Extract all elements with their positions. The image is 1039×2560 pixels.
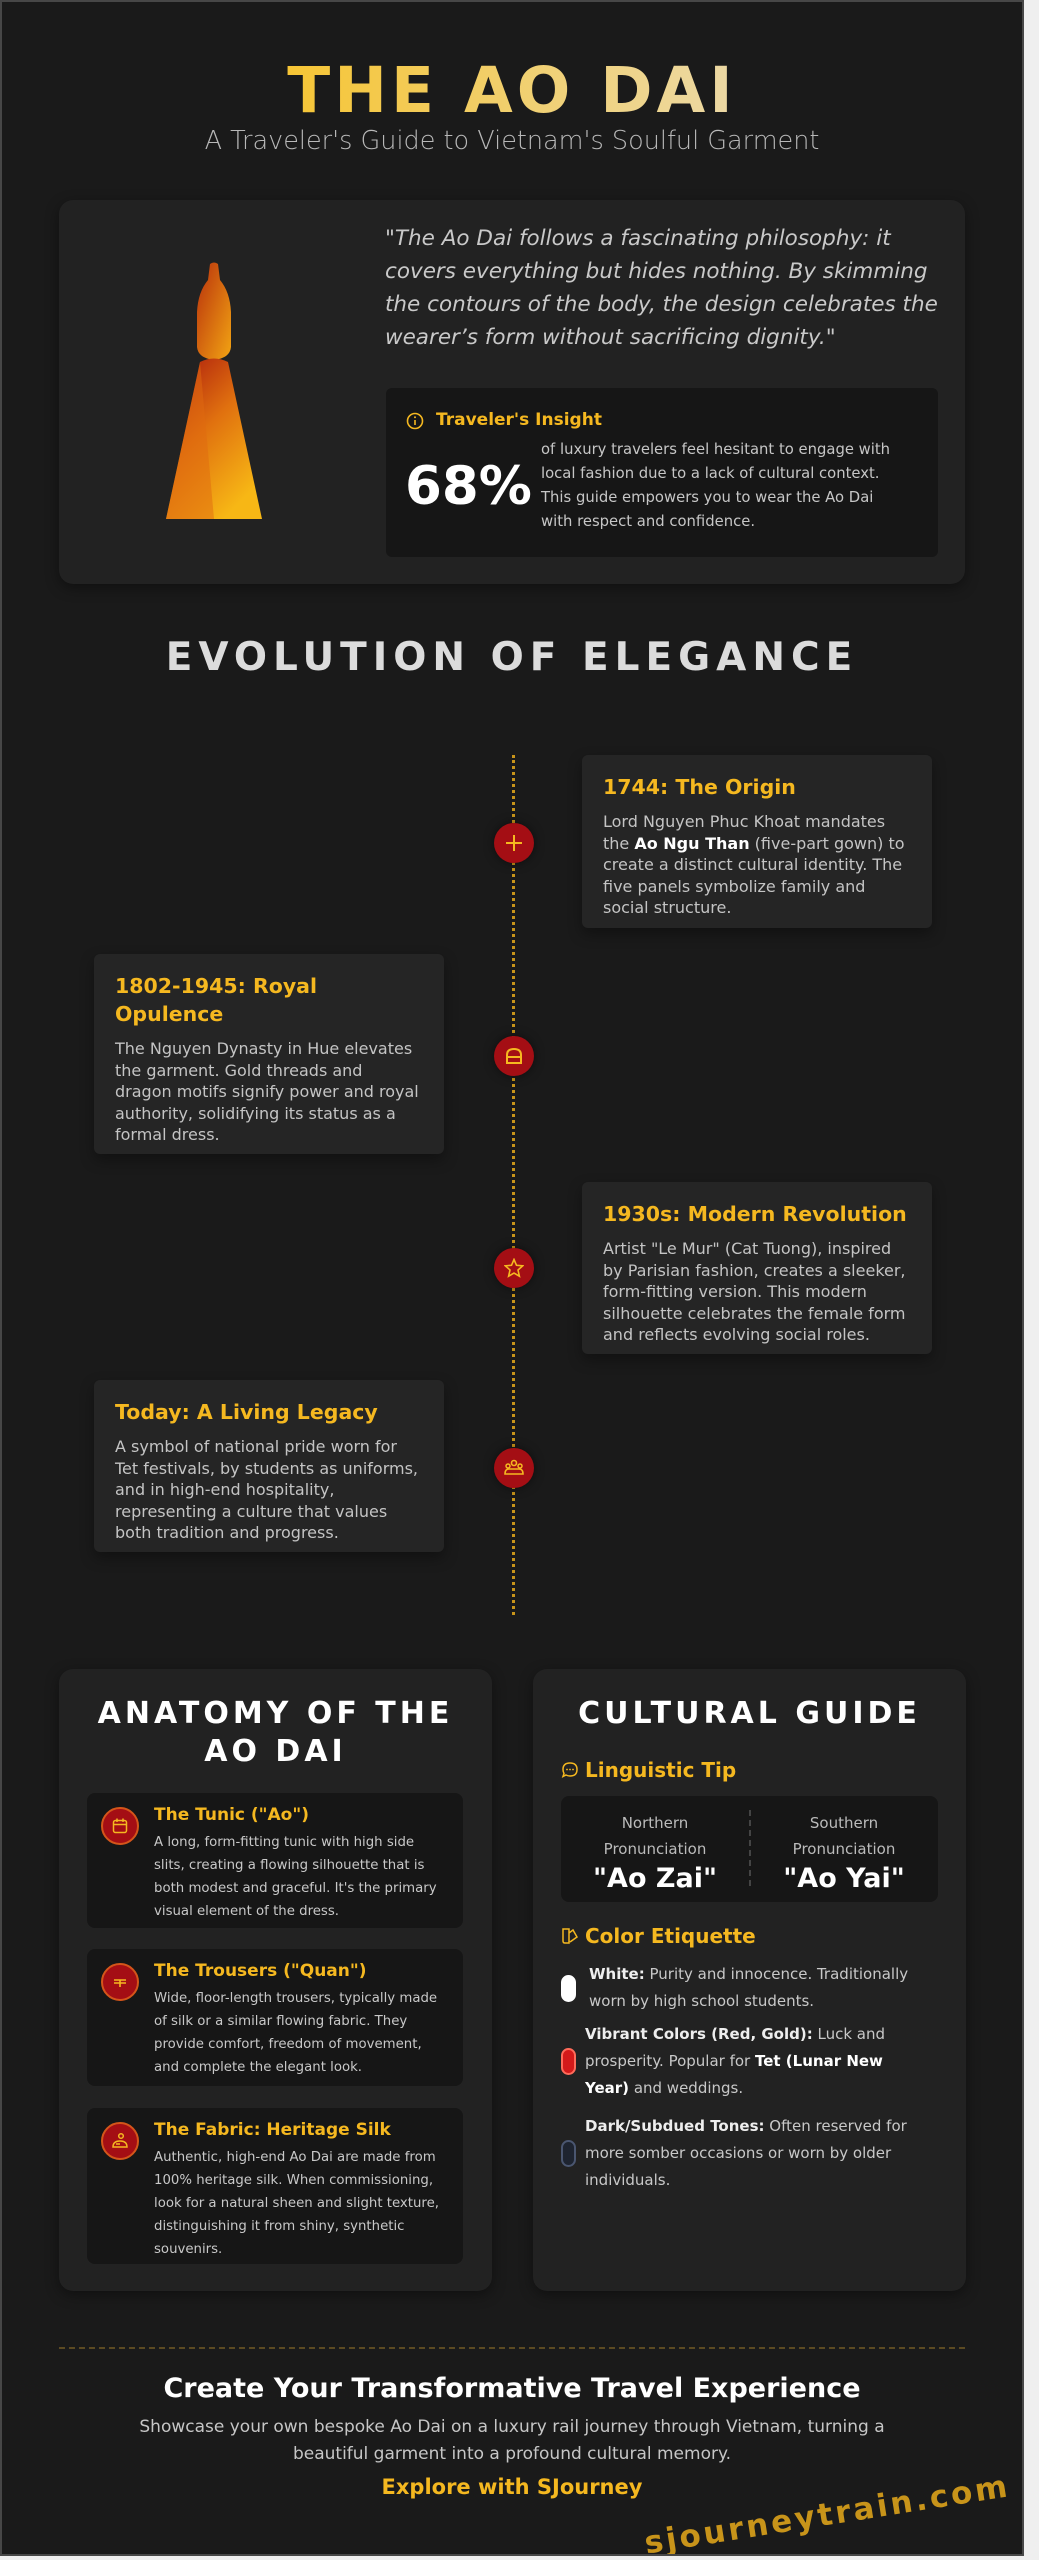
- icon: node 2 crown: [494, 1036, 534, 1076]
- card: 1802-1945: 1802-1945: Royal Opulence: [115, 974, 317, 1026]
- item: dark: Dark/Subdued Tones: Often reserved for more somber occasions or worn by older individuals.: [585, 2117, 907, 2189]
- sub: tunic: [87, 1793, 463, 1928]
- card: 1802-1945: [94, 954, 444, 1154]
- icon: node 4 people: [494, 1448, 534, 1488]
- card: 1930s: [582, 1182, 932, 1354]
- item: white: White: Purity and innocence. Traditionally worn by high school students.: [589, 1965, 908, 2010]
- sub: fabric: Authentic, high-end Ao Dai are made from 100% heritage silk. When commissioning, look for a natural sheen and slight texture, distinguishing it from shiny, synthetic souvenirs.: [154, 2150, 439, 2257]
- timeline line: [512, 755, 515, 1615]
- pronunciation box: Pronunciation: [793, 1840, 895, 1858]
- callout: traveler's insight: 68%: [405, 456, 532, 517]
- subheading: color etiquette: Color Etiquette: [585, 1924, 756, 1948]
- card: 1802-1945: The Nguyen Dynasty in Hue elevates the garment. Gold threads and dragon motifs signify power and royal authority, solidifying its status as a formal dress.: [115, 1039, 419, 1144]
- subtitle: A Traveler's Guide to Vietnam's Soulful Garment: [205, 126, 819, 156]
- card: today: Today: A Living Legacy: [115, 1400, 378, 1424]
- callout: traveler's insight: [386, 388, 938, 557]
- heading: anatomy: ANATOMY OF THE: [98, 1696, 453, 1731]
- callout: traveler's insight: of luxury travelers feel hesitant to engage with local fashion due to a lack of cultural context. This guide empowers you to wear the Ao Dai with respect and confidence.: [541, 441, 890, 530]
- sub: trousers: Wide, floor-length trousers, typically made of silk or a similar flowing fabric. They provide comfort, freedom of movement, and complete the elegant look.: [154, 1991, 437, 2075]
- sub: trousers: The Trousers ("Quan"): [154, 1961, 366, 1981]
- icon: ao dai figure: [166, 262, 262, 519]
- heading: evolution: EVOLUTION OF ELEGANCE: [166, 635, 858, 680]
- divider: [59, 2347, 965, 2349]
- card: 1930s: 1930s: Modern Revolution: [603, 1202, 907, 1226]
- cta text: Showcase your own bespoke Ao Dai on a luxury rail journey through Vietnam, turning a beautiful garment into a profound cultural memory.: [139, 2417, 885, 2464]
- icon: tunic: [101, 1807, 139, 1845]
- callout: traveler's insight: Traveler's Insight: [436, 410, 602, 430]
- card: today: A symbol of national pride worn for Tet festivals, by students as uniforms, and in high-end hospitality, representing a culture that values both tradition and progress.: [115, 1437, 418, 1542]
- subheading: linguistic tip: Linguistic Tip: [585, 1758, 736, 1782]
- pronunciation box: [561, 1796, 938, 1902]
- pronunciation box: "Ao Yai": [783, 1863, 905, 1894]
- heading: anatomy: AO DAI: [204, 1734, 347, 1769]
- icon: info: [406, 412, 424, 430]
- icon: node 3 star: [494, 1248, 534, 1288]
- heading: cultural guide: CULTURAL GUIDE: [578, 1696, 921, 1731]
- title: THE AO DAI: [287, 54, 737, 127]
- icon: fabric: [101, 2122, 139, 2160]
- sub: tunic: A long, form-fitting tunic with high side slits, creating a flowing silhouette that is both modest and graceful. It's the primary visual element of the dress.: [154, 1835, 437, 1919]
- pronunciation box: Southern: [810, 1814, 878, 1832]
- card: 1744: Lord Nguyen Phuc Khoat mandates the Ao Ngu Than (five-part gown) to create a distinct cultural identity. The five panels symbolize family and social structure.: [603, 812, 905, 917]
- sub: fabric: [87, 2108, 463, 2264]
- item: vibrant: Vibrant Colors (Red, Gold): Luck and prosperity. Popular for Tet (Lunar New Year) and weddings.: [585, 2025, 885, 2097]
- cta link: Explore with SJourney: [382, 2475, 642, 2499]
- icon: node 1 plus: [494, 823, 534, 863]
- quote: "The Ao Dai follows a fascinating philosophy: it covers everything but hides nothing. By skimming the contours of the body, the design celebrates the wearer’s form without sacrificing dignity.": [385, 226, 938, 350]
- panel: anatomy: [59, 1669, 492, 2291]
- heading: anatomy: [98, 1696, 453, 1769]
- card: today: [94, 1380, 444, 1552]
- cta heading: Create Your Transformative Travel Experience: [163, 2373, 861, 2404]
- sub: trousers: [87, 1949, 463, 2086]
- sub: tunic: The Tunic ("Ao"): [154, 1805, 309, 1825]
- pronunciation box: Pronunciation: [604, 1840, 706, 1858]
- card: 1744: [582, 755, 932, 928]
- card: 1930s: Artist "Le Mur" (Cat Tuong), inspired by Parisian fashion, creates a sleeker, form-fitting version. This modern silhouette celebrates the female form and reflects evolving social roles.: [603, 1239, 906, 1344]
- icon: trousers: [101, 1963, 139, 2001]
- card: 1744: 1744: The Origin: [603, 775, 796, 799]
- panel: intro: [59, 200, 965, 584]
- pronunciation box: Northern: [622, 1814, 688, 1832]
- sub: fabric: The Fabric: Heritage Silk: [154, 2120, 391, 2140]
- panel: cultural guide: [533, 1669, 966, 2291]
- pronunciation box: "Ao Zai": [593, 1863, 717, 1894]
